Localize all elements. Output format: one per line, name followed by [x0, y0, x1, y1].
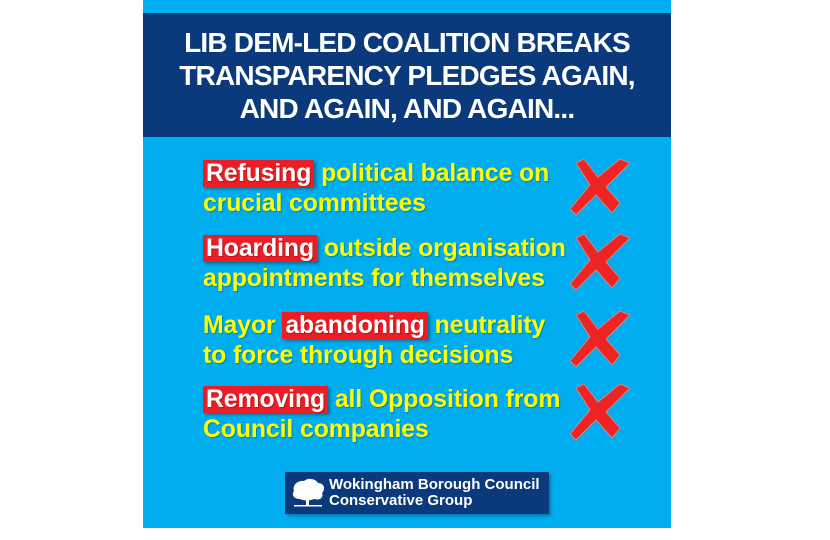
- logo text: Conservative Group: [329, 492, 472, 509]
- cross 2: [569, 233, 631, 291]
- icon: tree: [292, 478, 324, 506]
- card: [143, 0, 671, 528]
- item 3: [203, 312, 546, 370]
- cross 1: [569, 158, 631, 216]
- item 1: [203, 160, 550, 217]
- item 4: Council companies: [203, 416, 429, 443]
- header title: LIB DEM-LED COALITION BREAKS: [184, 27, 630, 58]
- item 4: Removing all Opposition from: [206, 386, 560, 413]
- item 2: Hoarding outside organisation: [206, 235, 566, 262]
- cross 3: [569, 310, 631, 368]
- logo text: [329, 476, 540, 509]
- header title: AND AGAIN, AND AGAIN...: [240, 93, 574, 124]
- logo: [285, 472, 549, 514]
- item 3: to force through decisions: [203, 342, 513, 369]
- item 2: [203, 235, 566, 292]
- logo text: Wokingham Borough Council: [329, 476, 540, 493]
- cross 4: [569, 383, 631, 441]
- header title: TRANSPARENCY PLEDGES AGAIN,: [179, 60, 635, 91]
- item 2: appointments for themselves: [203, 265, 545, 292]
- item 3: Mayor abandoning neutrality: [203, 312, 545, 339]
- item 1: crucial committees: [203, 190, 426, 217]
- header title: [143, 13, 671, 137]
- item 4: [203, 386, 560, 444]
- item 1: Refusing political balance on: [206, 160, 549, 187]
